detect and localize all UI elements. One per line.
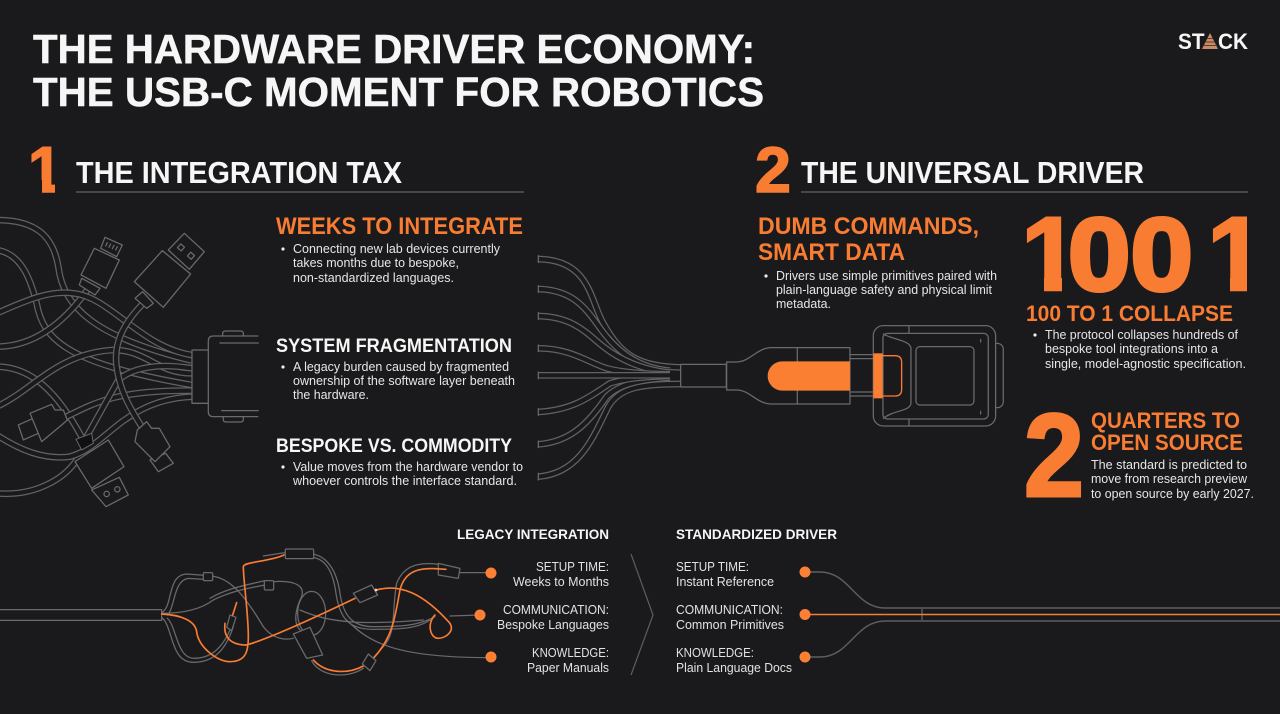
text block: weeks to integrate: takes months due to bespoke, [293, 256, 459, 270]
logo: STACK: STACK [1178, 29, 1248, 54]
stat: 100 to 1 collapse: 00 [1068, 197, 1193, 312]
connector: usb-a plug bottom [75, 433, 128, 507]
stat: 100 to 1 collapse: 1 [1021, 196, 1079, 313]
list: legacy integration attributes: Paper Manuals [527, 661, 609, 675]
stat: 2 quarters to open source: OPEN SOURCE [1091, 430, 1243, 455]
diagram: tangled legacy wiring [0, 549, 487, 675]
stat: 2 quarters to open source [1024, 390, 1254, 522]
stat: 100 to 1 collapse: The protocol collapses hundreds of [1045, 328, 1238, 342]
list: standardized driver attributes: KNOWLEDGE: [676, 646, 754, 660]
stat: 2 quarters to open source: 2 [1024, 390, 1084, 522]
connector: lightning plug [79, 237, 122, 295]
text block: dumb commands smart data: DUMB COMMANDS, [758, 213, 979, 240]
list: standardized driver attributes: SETUP TIME: [676, 560, 749, 574]
list: legacy integration attributes: Weeks to Months [513, 575, 609, 589]
list: standardized driver attributes: Common Primitives [676, 618, 784, 632]
text block: dumb commands smart data: plain-language safety and physical limit [776, 283, 992, 297]
list: standardized driver attributes [676, 560, 792, 675]
text block: weeks to integrate: Connecting new lab devices currently [293, 242, 501, 256]
panel: the integration tax heading: THE INTEGRATION TAX [76, 155, 402, 190]
text block: system fragmentation [276, 335, 515, 402]
text block: system fragmentation: A legacy burden caused by fragmented [293, 360, 509, 374]
text block: weeks to integrate: non-standardized languages. [293, 271, 454, 285]
panel: the universal driver heading [755, 134, 1248, 206]
connector: usb-a plug top [134, 233, 204, 308]
stat: 100 to 1 collapse: 1 [1207, 196, 1265, 313]
title: THE USB-C MOMENT FOR ROBOTICS [33, 69, 764, 115]
stat: 100 to 1 collapse: single, model-agnostic specification. [1045, 357, 1246, 371]
orange plug highlight [768, 353, 902, 398]
text block: weeks to integrate: WEEKS TO INTEGRATE [276, 213, 523, 240]
text block: dumb commands smart data [758, 213, 997, 311]
text block: bespoke vs commodity: BESPOKE VS. COMMODITY [276, 435, 512, 457]
stat: 100 to 1 collapse: bespoke tool integrations into a [1045, 342, 1219, 356]
connector: micro usb plug [135, 422, 173, 472]
illustration: universal driver plug [538, 256, 1003, 480]
heading: legacy integration: LEGACY INTEGRATION [457, 526, 609, 542]
list: legacy integration attributes [497, 560, 609, 675]
list: standardized driver attributes: Plain Language Docs [676, 661, 792, 675]
title [33, 26, 764, 115]
text block: bespoke vs commodity: Value moves from the hardware vendor to [293, 460, 523, 474]
list: legacy integration attributes: COMMUNICATION: [503, 603, 609, 617]
connector: multi-pin housing [192, 331, 258, 422]
plug body [681, 348, 873, 404]
text block: bespoke vs commodity [276, 435, 523, 488]
text block: dumb commands smart data: SMART DATA [758, 239, 905, 266]
stat: 2 quarters to open source: to open source by early 2027. [1091, 487, 1254, 501]
panel: the universal driver heading: 2 [755, 134, 791, 206]
list: legacy integration attributes: SETUP TIME: [536, 560, 609, 574]
text block: dumb commands smart data: metadata. [776, 297, 831, 311]
legacy connector dots [474, 568, 496, 662]
stat: 2 quarters to open source: The standard is predicted to [1091, 458, 1247, 472]
stat: 100 to 1 collapse [1026, 216, 1247, 370]
connector: ethernet plug [18, 404, 67, 442]
panel: the universal driver heading: THE UNIVERSAL DRIVER [801, 155, 1144, 190]
stat: 2 quarters to open source: QUARTERS TO [1091, 408, 1240, 433]
arrow: chevron [631, 554, 653, 675]
list: standardized driver attributes: COMMUNICATION: [676, 603, 783, 617]
list: standardized driver attributes: Instant Reference [676, 575, 774, 589]
panel: the integration tax heading [31, 146, 524, 193]
illustration: tangled legacy cables [0, 220, 258, 507]
device socket [873, 326, 1003, 426]
text block: dumb commands smart data: Drivers use simple primitives paired with [776, 269, 997, 283]
text block: system fragmentation: SYSTEM FRAGMENTATION [276, 335, 512, 357]
heading: standardized driver: STANDARDIZED DRIVER [676, 526, 837, 542]
list: legacy integration attributes: Bespoke Languages [497, 618, 609, 632]
panel: the integration tax heading: 1 [28, 133, 62, 206]
list: legacy integration attributes: KNOWLEDGE: [532, 646, 609, 660]
text block: system fragmentation: the hardware. [293, 388, 369, 402]
text block: weeks to integrate [276, 213, 523, 285]
stat: 2 quarters to open source: move from research preview [1091, 472, 1248, 486]
text block: bespoke vs commodity: whoever controls the interface standard. [292, 474, 517, 488]
title: THE HARDWARE DRIVER ECONOMY: [33, 26, 755, 72]
diagram: standardized wiring [800, 566, 1280, 662]
text block: system fragmentation: ownership of the software layer beneath [293, 374, 515, 388]
stat: 100 to 1 collapse: 100 TO 1 COLLAPSE [1026, 301, 1233, 326]
